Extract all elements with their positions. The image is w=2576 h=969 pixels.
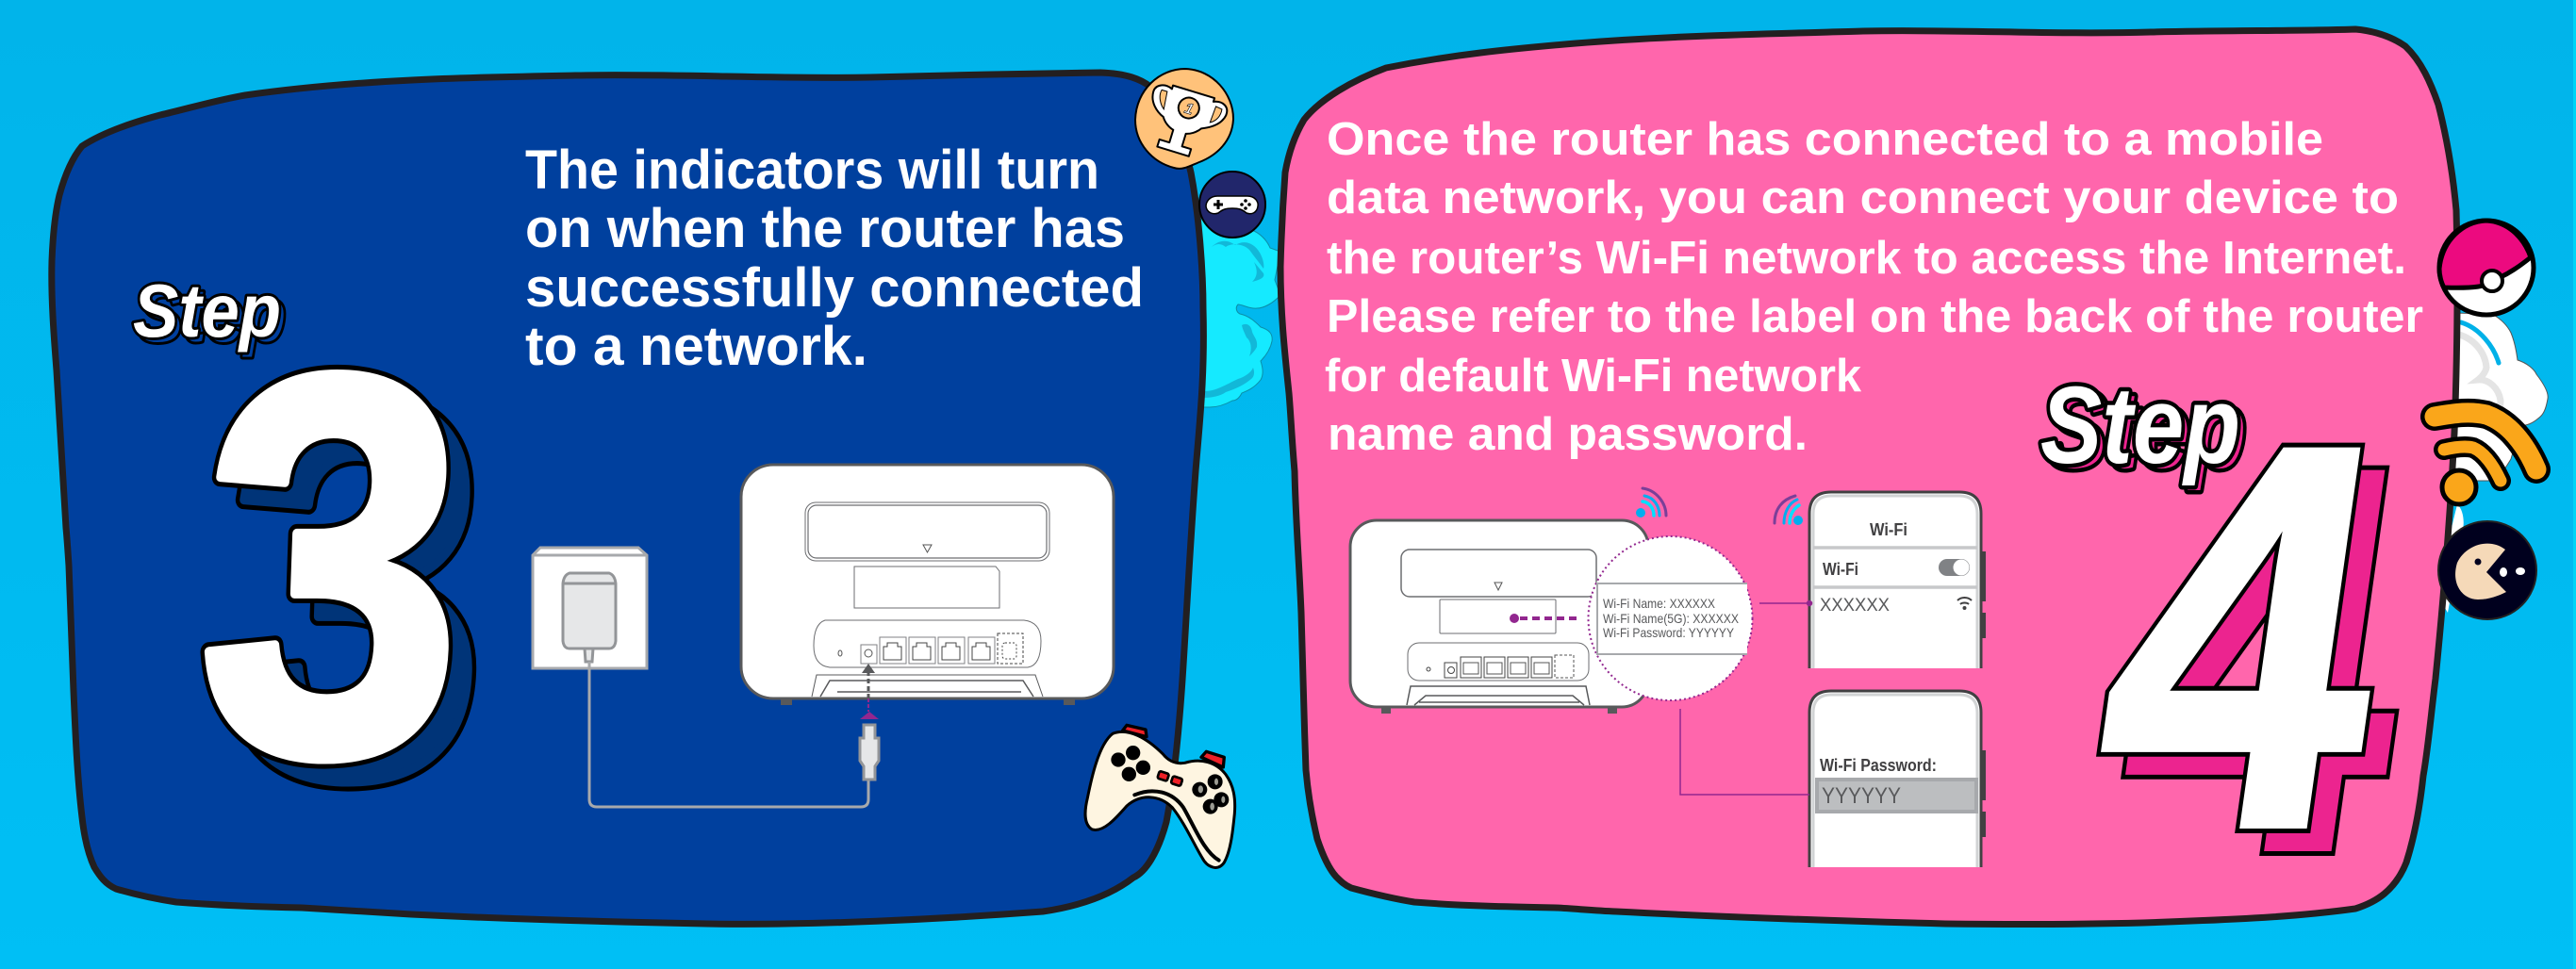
numeral: 4: 4 <box>2094 354 2448 964</box>
icon: orange wifi <box>2435 413 2536 504</box>
text block: step 4 description: the router’s Wi-Fi network to access the Internet. <box>1327 233 2406 284</box>
icon: wifi signal beside phone <box>1775 496 1803 525</box>
illustration: power cable and plug <box>589 662 879 807</box>
callout: label zoom circle: Wi-Fi Password: YYYYYY <box>1603 625 1735 640</box>
icon: pokeball <box>2439 221 2534 315</box>
numeral: 4: 4 <box>2070 332 2423 942</box>
text block: step 3 description <box>525 140 1144 377</box>
panel: step 3 background <box>52 73 1203 924</box>
text block: step 3 description: to a network. <box>525 316 867 377</box>
icon: pacman badge <box>2438 521 2536 619</box>
icon: gamepad badge <box>1199 172 1265 238</box>
numeral: 3: 3 <box>190 262 475 868</box>
text block: step 4 description: for default Wi-Fi network <box>1325 351 1862 402</box>
phone screen: Wi-Fi list <box>1809 492 1986 668</box>
text block: step 3 description: The indicators will turn <box>525 140 1099 201</box>
text block: step 4 description: data network, you can connect your device to <box>1327 172 2399 223</box>
numeral: 4: 4 <box>2094 354 2448 964</box>
illustration: white cloud behind right icons <box>2442 313 2548 613</box>
phone screen: password entry: YYYYYY <box>1822 783 1901 809</box>
numeral: 3: 3 <box>190 262 475 868</box>
illustration: router rear view, step 4 <box>1350 520 1648 714</box>
numeral: 4: 4 <box>2070 332 2423 942</box>
text block: step 4 description: Please refer to the label on the back of the router <box>1327 291 2423 342</box>
illustration: router rear view, step 3 <box>741 465 1114 705</box>
icon: trophy badge: 1 <box>1182 101 1196 119</box>
arrow: label pointer dashed line <box>1510 614 1580 623</box>
text block: step 3 description: on when the router has <box>525 198 1125 259</box>
text block: step 4 description <box>1325 114 2423 460</box>
heading: Step label for step 4: Step <box>2046 369 2246 491</box>
illustration: wall outlet with power adapter <box>533 548 647 668</box>
callout: label zoom circle <box>1588 536 1752 700</box>
callout: label zoom circle: Wi-Fi Name(5G): XXXXXX <box>1603 611 1740 626</box>
connectors: label to phones <box>1680 601 1812 795</box>
heading: Step label for step 4: Step <box>2040 364 2240 486</box>
panel: step 4 background <box>1280 29 2457 925</box>
numeral: 3: 3 <box>214 285 499 891</box>
icon: trophy badge <box>1135 69 1233 169</box>
phone screen: Wi-Fi list: Wi-Fi <box>1870 520 1907 539</box>
icon: wifi signal above router <box>1636 488 1666 517</box>
phone screen: password entry: Wi-Fi Password: <box>1820 756 1937 775</box>
arrow: plug into power port <box>860 664 879 719</box>
phone screen: password entry <box>1809 691 1986 867</box>
heading: Step label for step 3: Step <box>133 269 281 353</box>
numeral: 3: 3 <box>214 285 499 891</box>
phone screen: Wi-Fi list: XXXXXX <box>1820 596 1890 616</box>
text block: step 3 description: successfully connected <box>525 257 1144 319</box>
text block: step 4 description: name and password. <box>1328 409 1808 460</box>
illustration: cyan cloud between panels <box>1193 220 1280 407</box>
callout: label zoom circle: Wi-Fi Name: XXXXXX <box>1603 596 1716 611</box>
text block: step 4 description: Once the router has connected to a mobile <box>1327 114 2323 165</box>
icon: game controller <box>1085 725 1235 867</box>
heading: Step label for step 3: Step <box>138 273 286 357</box>
phone screen: Wi-Fi list: Wi-Fi <box>1823 560 1858 579</box>
